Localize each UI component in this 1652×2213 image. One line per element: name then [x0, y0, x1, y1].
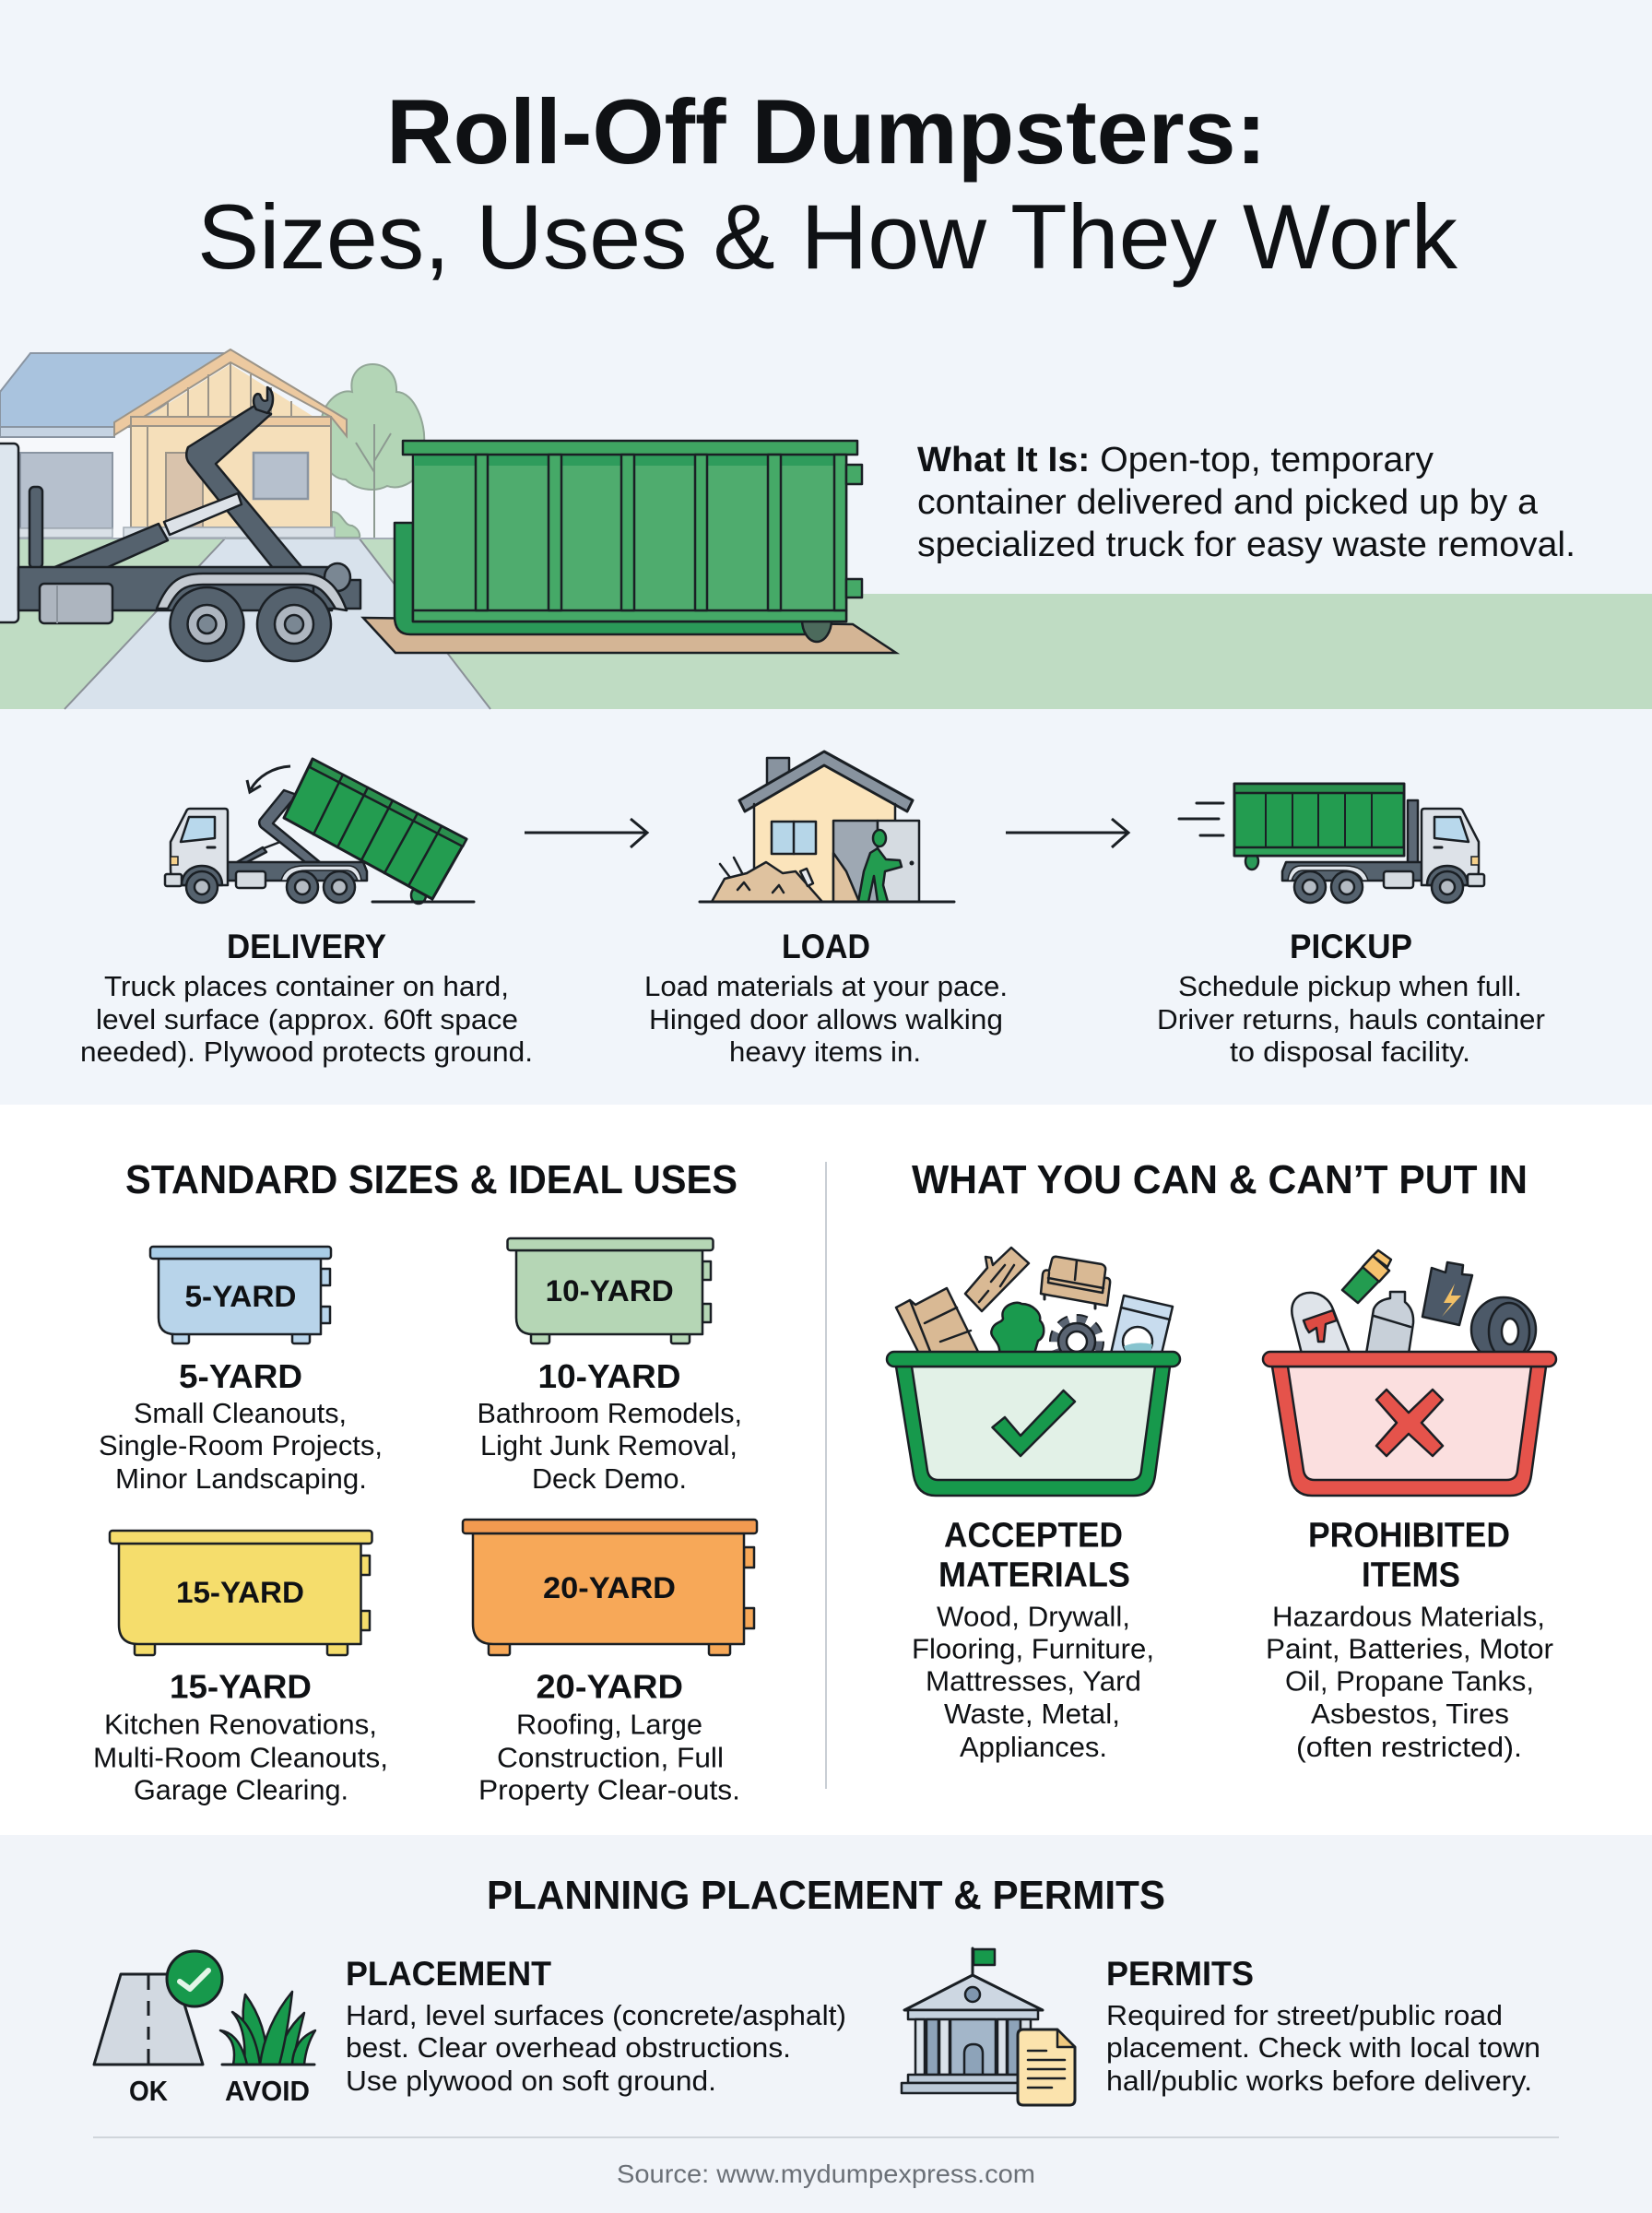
- heading: standard sizes: STANDARD SIZES & IDEAL USES: [125, 1157, 738, 1202]
- size: 10-yard: [478, 1357, 742, 1495]
- step: load: [644, 928, 1008, 1068]
- step: delivery: [80, 928, 533, 1068]
- size: 10-yard: Bathroom Remodels,: [478, 1397, 742, 1429]
- prohibited items text: Oil, Propane Tanks,: [1285, 1665, 1534, 1697]
- accepted materials text: [912, 1516, 1154, 1763]
- permits text: PERMITS: [1106, 1955, 1254, 1993]
- permits text: hall/public works before delivery.: [1106, 2065, 1532, 2097]
- prohibited items text: ITEMS: [1362, 1556, 1460, 1595]
- arrow: delivery to load: [525, 819, 647, 847]
- heading: planning placement and permits: PLANNING PLACEMENT & PERMITS: [487, 1873, 1165, 1918]
- step: delivery: DELIVERY: [227, 928, 386, 965]
- placement text: Hard, level surfaces (concrete/asphalt): [346, 1999, 846, 2031]
- prohibited items text: PROHIBITED: [1308, 1516, 1510, 1555]
- size: 15-yard: Kitchen Renovations,: [104, 1708, 377, 1741]
- heading: what you can and can't put in: WHAT YOU CAN & CAN’T PUT IN: [912, 1157, 1528, 1202]
- step: load: LOAD: [782, 928, 870, 965]
- road: [0, 538, 490, 709]
- accepted materials text: ACCEPTED: [944, 1516, 1123, 1555]
- accepted materials text: Waste, Metal,: [944, 1698, 1120, 1730]
- label: OK: OK: [129, 2075, 169, 2107]
- size: 15-yard: 15-YARD: [170, 1667, 312, 1706]
- truck: [0, 387, 360, 661]
- title: Sizes, Uses & How They Work: [197, 185, 1458, 288]
- step: pickup: Driver returns, hauls container: [1157, 1003, 1545, 1035]
- accepted materials text: MATERIALS: [938, 1556, 1130, 1595]
- text: what it is: specialized truck for easy waste removal.: [917, 526, 1575, 564]
- step: pickup: to disposal facility.: [1230, 1035, 1470, 1068]
- step: pickup: PICKUP: [1290, 928, 1412, 965]
- size: 5-yard: 5-YARD: [179, 1357, 302, 1395]
- icon: 5-yard dumpster: [150, 1247, 331, 1343]
- accepted materials text: Wood, Drywall,: [937, 1601, 1130, 1632]
- panel: hero illustration: [0, 349, 1652, 709]
- items: paint, batteries, propane, tire: [1292, 1250, 1536, 1362]
- house: grey building: [0, 353, 226, 538]
- permits text: placement. Check with local town: [1106, 2031, 1540, 2064]
- icon: 10-yard dumpster: 10-YARD: [546, 1274, 674, 1308]
- prohibited items text: [1266, 1516, 1553, 1763]
- step: load: heavy items in.: [729, 1035, 921, 1068]
- icon: 5-yard dumpster: 5-YARD: [184, 1280, 297, 1313]
- permits text: Required for street/public road: [1106, 1999, 1503, 2031]
- placement text: PLACEMENT: [346, 1955, 551, 1993]
- size: 5-yard: Single-Room Projects,: [99, 1429, 383, 1462]
- icon: grass avoid: [220, 1992, 315, 2065]
- prohibited items text: Asbestos, Tires: [1311, 1698, 1509, 1730]
- size: 20-yard: 20-YARD: [537, 1667, 683, 1706]
- accepted materials text: Appliances.: [960, 1731, 1107, 1763]
- size: 5-yard: [99, 1357, 383, 1495]
- step: delivery: level surface (approx. 60ft space: [96, 1003, 518, 1035]
- label: AVOID: AVOID: [225, 2075, 310, 2107]
- icon: prohibited items basket: [1263, 1250, 1556, 1496]
- icon: road OK with check: [94, 1951, 222, 2065]
- icon: 15-yard dumpster: 15-YARD: [176, 1576, 304, 1609]
- icon: accepted materials basket: [887, 1248, 1180, 1496]
- step: pickup: Schedule pickup when full.: [1178, 970, 1522, 1002]
- prohibited items text: (often restricted).: [1296, 1731, 1522, 1763]
- accepted materials text: Mattresses, Yard: [926, 1665, 1141, 1697]
- text: what it is: [917, 441, 1575, 564]
- prohibited items text: Hazardous Materials,: [1272, 1601, 1545, 1632]
- permits text: [1106, 1955, 1540, 2097]
- step: load: Load materials at your pace.: [644, 970, 1008, 1002]
- arrow: load to pickup: [1006, 819, 1128, 847]
- placement text: Use plywood on soft ground.: [346, 2065, 716, 2097]
- step: load: Hinged door allows walking: [649, 1003, 1003, 1035]
- size: 5-yard: Small Cleanouts,: [134, 1397, 347, 1429]
- title: Roll-Off Dumpsters:: [386, 80, 1267, 183]
- placement text: best. Clear overhead obstructions.: [346, 2031, 791, 2064]
- step: delivery: Truck places container on hard,: [104, 970, 509, 1002]
- icon: 15-yard dumpster: [110, 1531, 372, 1655]
- placement text: [346, 1955, 846, 2097]
- size: 15-yard: Multi-Room Cleanouts,: [93, 1741, 388, 1774]
- step: delivery: needed). Plywood protects ground.: [80, 1035, 533, 1068]
- source line: Source: www.mydumpexpress.com: [617, 2160, 1035, 2188]
- size: 10-yard: Deck Demo.: [532, 1462, 687, 1495]
- size: 20-yard: Property Clear-outs.: [478, 1774, 740, 1805]
- icon: pickup truck: [1179, 784, 1484, 903]
- size: 10-yard: Light Junk Removal,: [480, 1429, 738, 1462]
- dumpster: [395, 441, 862, 642]
- text: what it is: What It Is: Open-top, temporary: [917, 441, 1434, 479]
- size: 10-yard: 10-YARD: [538, 1357, 680, 1395]
- text: what it is: container delivered and picked up by a: [917, 483, 1539, 522]
- tree: [321, 364, 426, 538]
- accepted materials text: Flooring, Furniture,: [912, 1632, 1154, 1665]
- step: pickup: [1157, 928, 1545, 1068]
- title: [197, 80, 1458, 288]
- house: timber gable: [114, 349, 347, 538]
- icon: 10-yard dumpster: [507, 1238, 714, 1343]
- size: 15-yard: [93, 1667, 388, 1805]
- items: wood, plank, sofa, shrub, gear, washer: [896, 1248, 1173, 1363]
- icon: 20-yard dumpster: [463, 1520, 757, 1655]
- icon: load house: [700, 751, 954, 902]
- icon: town hall with document: [902, 1948, 1075, 2105]
- size: 20-yard: Construction, Full: [497, 1741, 724, 1774]
- size: 5-yard: Minor Landscaping.: [115, 1462, 367, 1495]
- size: 20-yard: Roofing, Large: [516, 1708, 702, 1741]
- icon: 20-yard dumpster: 20-YARD: [543, 1571, 676, 1604]
- prohibited items text: Paint, Batteries, Motor: [1266, 1632, 1553, 1665]
- plywood: [363, 618, 896, 653]
- icon: delivery truck: [165, 759, 474, 904]
- size: 20-yard: [478, 1667, 740, 1805]
- size: 15-yard: Garage Clearing.: [134, 1774, 348, 1805]
